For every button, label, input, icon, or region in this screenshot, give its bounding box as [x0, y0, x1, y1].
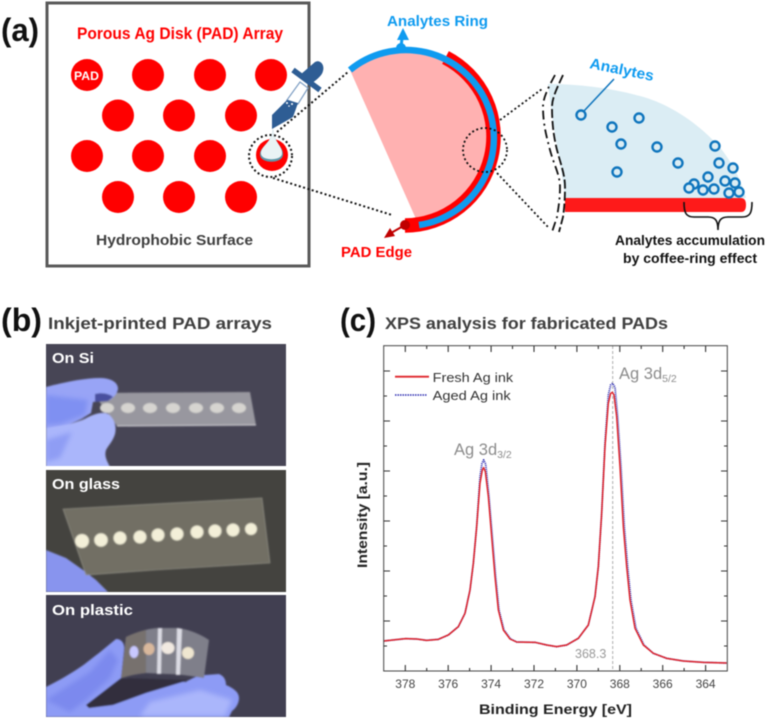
- pink droplet area: [350, 50, 494, 225]
- red disk array: [71, 59, 287, 213]
- glass slide: [63, 498, 270, 575]
- glove finger: [46, 413, 116, 467]
- diagram: half disk cross-section: [341, 13, 494, 261]
- glove: [46, 550, 108, 592]
- label: hydrophobic surface: Hydrophobic Surface: [96, 232, 253, 249]
- plot frame: [384, 346, 727, 671]
- red PAD bar: [565, 198, 746, 212]
- icon: pipette: [272, 61, 323, 129]
- caption: analytes accumulation: by coffee-ring effect: [623, 251, 758, 266]
- brace: [684, 202, 752, 230]
- analytes leader line: [584, 79, 614, 111]
- heading: inkjet-printed PAD arrays: Inkjet-printed PAD arrays: [48, 314, 272, 333]
- red PAD edge arc: [405, 58, 494, 226]
- panel frame: [47, 3, 309, 266]
- label: analytes ring: Analytes Ring: [387, 13, 488, 30]
- legend: Fresh Ag ink: [433, 370, 514, 385]
- chart: XPS spectrum: [354, 346, 727, 717]
- peak label: Ag 3d5/2: Ag 3d: [619, 365, 662, 383]
- gap between fingers: [71, 418, 84, 424]
- label: on Si: On Si: [52, 350, 94, 367]
- icon: droplet on disk: [256, 129, 288, 171]
- label: on glass: On glass: [52, 476, 120, 493]
- label: analytes: Analytes: [588, 55, 655, 85]
- diagram: coffee-ring detail: [543, 55, 765, 266]
- zoom callout: dotted lines and circle from disk: [249, 72, 392, 215]
- flexible film: [145, 627, 210, 679]
- label: on plastic: On plastic: [52, 602, 133, 619]
- x axis tick labels: 366: [653, 677, 673, 691]
- axis ticks: [384, 346, 727, 671]
- heading: XPS analysis: XPS analysis for fabricated PADs: [385, 314, 668, 333]
- x axis tick labels: 376: [438, 677, 459, 691]
- x axis tick labels: 364: [696, 677, 716, 691]
- label: (a): (a): [1, 12, 39, 48]
- photo: on glass: [46, 470, 286, 592]
- vertical reference line 368.3: [612, 346, 614, 671]
- caption: analytes accumulation: Analytes accumulation: [615, 233, 765, 248]
- legend: Aged Ag ink: [433, 388, 511, 403]
- peak label: Ag 3d3/2: 3/2: [497, 449, 512, 461]
- glove hand: [46, 639, 239, 717]
- x axis tick labels: 370: [567, 677, 587, 691]
- x axis tick labels: 378: [395, 677, 416, 691]
- spectrum curves: [384, 383, 727, 663]
- x axis tick labels: [395, 677, 716, 691]
- aged Ag ink curve: [384, 383, 727, 663]
- break marks: [543, 75, 565, 232]
- panel: PAD array on hydrophobic surface: [47, 3, 309, 266]
- arrow: analytes ring: [396, 28, 409, 53]
- y axis title: Intensity [a.u.]: [354, 462, 370, 568]
- label: (c): (c): [340, 302, 376, 338]
- blue analytes ring arc: [350, 50, 494, 225]
- fresh Ag ink curve: [384, 392, 727, 663]
- peak label: Ag 3d5/2: 5/2: [662, 373, 677, 385]
- heading: porous Ag disk array: Porous Ag Disk (PAD) Array: [77, 24, 283, 43]
- PAD disk label: PAD: [74, 71, 99, 83]
- legend: [395, 370, 514, 403]
- zoom callout: dotted circle and lines to detail: [463, 89, 548, 227]
- photo: on Si: [46, 344, 286, 467]
- x axis tick labels: 372: [524, 677, 544, 691]
- droplet profile: [548, 84, 746, 198]
- label: (b): (b): [1, 302, 42, 338]
- label: PAD edge: PAD Edge: [341, 244, 412, 261]
- analyte particles: [576, 110, 744, 198]
- value label: 368.3: 368.3: [575, 647, 606, 661]
- x axis tick labels: 374: [481, 677, 501, 691]
- x axis tick labels: 368: [610, 677, 630, 691]
- gap inside the hand: [86, 678, 189, 708]
- photo: on plastic: [46, 595, 286, 717]
- arrow: PAD edge: [384, 220, 410, 238]
- x axis title: Binding Energy [eV]: [479, 701, 632, 717]
- peak label: Ag 3d3/2: Ag 3d: [454, 441, 497, 459]
- glove thumb: [46, 378, 118, 430]
- glass slide: [93, 392, 256, 426]
